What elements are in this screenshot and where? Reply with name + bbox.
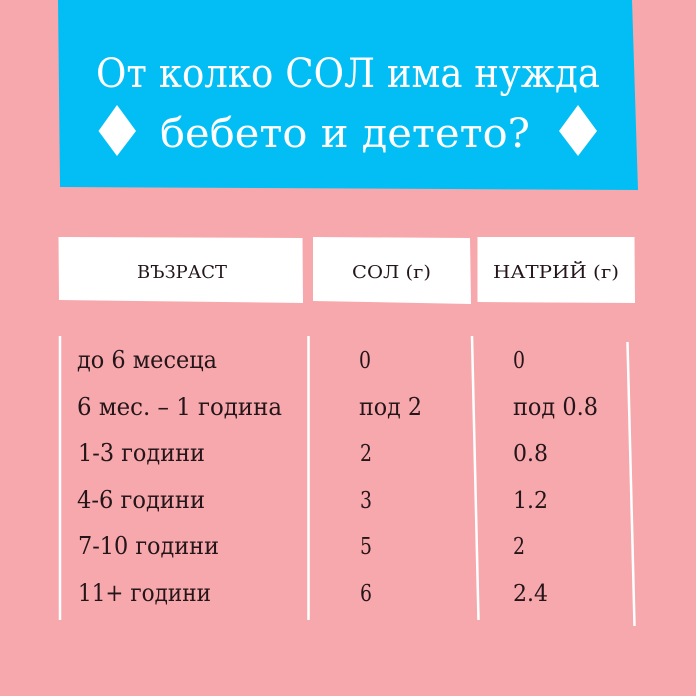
title line 1: От колко СОЛ има нужда (96, 51, 600, 97)
row: 1-3 years: 2 (360, 441, 372, 467)
header cell: sodium (478, 237, 635, 303)
row: up to 6 months: 0 (359, 348, 371, 374)
row: 11+ years (78, 579, 548, 607)
table rows (77, 346, 598, 607)
header cell: sodium: НАТРИЙ (г) (493, 260, 619, 283)
row: 4-6 years: 3 (360, 488, 372, 514)
row: 11+ years: 6 (360, 581, 372, 607)
row: 1-3 years: 1-3 години (78, 439, 205, 467)
column divider lines (60, 336, 634, 626)
row: 6 months to 1 year: 6 мес. – 1 година (77, 393, 282, 421)
header cell: age (58, 237, 303, 303)
row: 4-6 years (77, 486, 548, 514)
row: 11+ years: 2.4 (513, 581, 548, 607)
table header (58, 237, 635, 304)
row: 6 months to 1 year (77, 393, 598, 421)
row: 4-6 years: 4-6 години (77, 486, 205, 514)
header cell: salt: СОЛ (г) (352, 262, 431, 283)
row: 7-10 years (78, 532, 525, 560)
row: 1-3 years: 0.8 (513, 441, 548, 467)
icon: right diamond (559, 105, 597, 156)
row: up to 6 months: 0 (513, 348, 525, 374)
row: 6 months to 1 year: под 0.8 (513, 393, 598, 421)
row: 1-3 years (78, 439, 548, 467)
header cell: age: ВЪЗРАСТ (137, 262, 227, 283)
row: 11+ years: 11+ години (78, 579, 211, 607)
icon: left diamond (98, 105, 136, 156)
title line 2: бебето и детето? (160, 111, 530, 157)
title banner (58, 0, 638, 190)
row: 4-6 years: 1.2 (513, 488, 548, 514)
header cell: salt (313, 237, 471, 304)
row: up to 6 months (77, 346, 525, 374)
row: 6 months to 1 year: под 2 (359, 393, 422, 421)
row: 7-10 years: 7-10 години (78, 532, 219, 560)
row: 7-10 years: 2 (513, 534, 525, 560)
row: up to 6 months: до 6 месеца (77, 346, 217, 374)
row: 7-10 years: 5 (360, 534, 372, 560)
